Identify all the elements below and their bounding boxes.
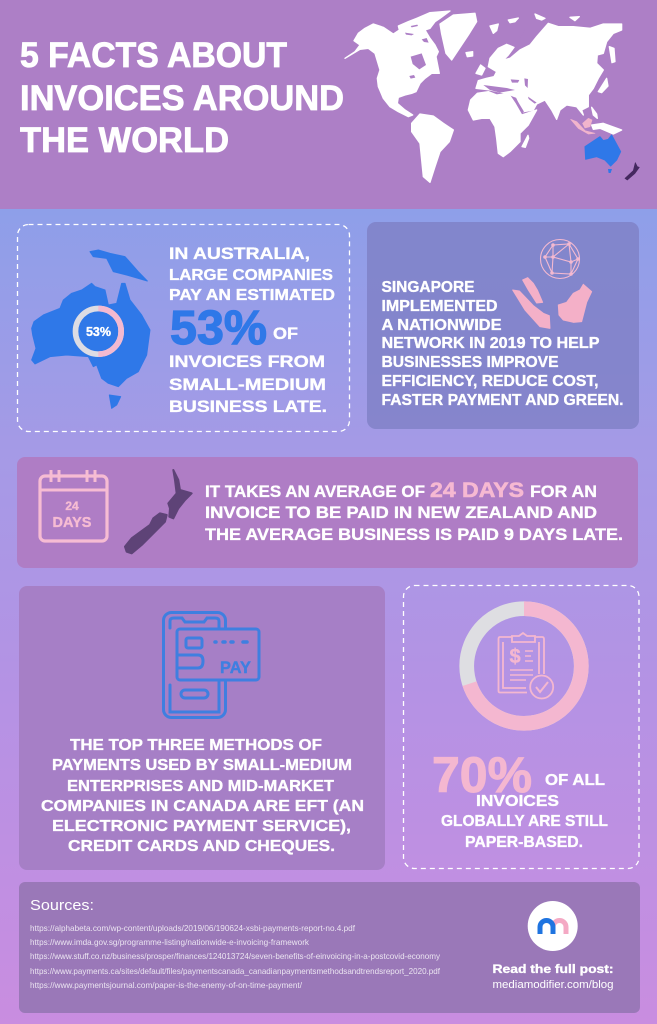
source links: https://www.payments.ca/sites/default/files/paymentscanada_canadianpaymentsmethodsandtrendsreport_2020.pdf <box>30 966 441 976</box>
text: Australia fact: IN AUSTRALIA, <box>169 244 310 263</box>
text: paper invoices fact: GLOBALLY ARE STILL <box>441 813 608 830</box>
title <box>20 36 344 160</box>
sources heading: Sources: <box>30 897 94 914</box>
source links: https://www.stuff.co.nz/business/prosper/finances/124013724/seven-benefits-of-einvoicing-in-a-postcovid-economy <box>30 951 441 961</box>
call to action <box>492 962 614 991</box>
icon: invoice clipboard <box>498 633 553 698</box>
text: Canada fact: THE TOP THREE METHODS OF <box>70 737 322 754</box>
panel: New Zealand <box>17 457 638 568</box>
panel: Singapore <box>367 222 639 429</box>
icon: network globe <box>540 240 580 278</box>
source links: https://alphabeta.com/wp-content/uploads/2019/06/190624-xsbi-payments-report-no.4.pdf <box>30 923 356 933</box>
text: Canada fact: COMPANIES IN CANADA ARE EFT (AN <box>41 798 364 815</box>
icon: Australia map with donut <box>32 250 150 408</box>
text: Singapore fact: EFFICIENCY, REDUCE COST, <box>382 373 598 390</box>
donut label: 53% <box>86 325 111 339</box>
header band <box>0 0 657 209</box>
icon: calendar <box>40 470 107 541</box>
text: paper invoices fact: PAPER-BASED. <box>465 834 583 851</box>
text: paper invoices fact: INVOICES <box>476 793 559 810</box>
source links: https://www.imda.gov.sg/programme-listing/nationwide-e-invoicing-framework <box>30 937 310 947</box>
title: 5 FACTS ABOUT <box>20 36 287 75</box>
text: New Zealand fact <box>205 479 623 544</box>
text: Singapore fact <box>382 279 624 409</box>
text: Singapore fact: FASTER PAYMENT AND GREEN. <box>382 392 624 409</box>
text: Canada fact: ENTERPRISES AND MID-MARKET <box>67 778 334 795</box>
text: Australia fact: OF <box>273 324 298 343</box>
text: New Zealand fact: IT TAKES AN AVERAGE OF <box>205 482 425 501</box>
title: INVOICES AROUND <box>20 79 344 118</box>
call to action: Read the full post: <box>492 962 614 976</box>
panel: paper invoices <box>404 586 639 868</box>
icon: calendar: 24 <box>65 499 79 513</box>
title: THE WORLD <box>20 121 229 160</box>
world map <box>345 11 639 182</box>
text: paper invoices fact: 70% <box>432 747 532 803</box>
text: New Zealand fact: FOR AN <box>530 482 597 501</box>
source links: https://www.paymentsjournal.com/paper-is-the-enemy-of-on-time-payment/ <box>30 980 303 990</box>
text: New Zealand fact: THE AVERAGE BUSINESS IS PAID 9 DAYS LATE. <box>205 525 623 544</box>
text: Singapore fact: NETWORK IN 2019 TO HELP <box>382 335 600 352</box>
text: Canada fact: ELECTRONIC PAYMENT SERVICE), <box>52 818 351 835</box>
text: Singapore fact: BUSINESSES IMPROVE <box>382 354 558 371</box>
text: Australia fact: PAY AN ESTIMATED <box>169 287 335 304</box>
text: Singapore fact: A NATIONWIDE <box>382 317 502 334</box>
text: paper invoices fact <box>432 747 608 851</box>
panel: Canada <box>19 586 385 870</box>
logo: mediamodifier <box>528 901 578 951</box>
icon: phone and card: PAY <box>220 658 252 677</box>
text: New Zealand fact: 24 DAYS <box>430 479 524 502</box>
text: Canada fact: CREDIT CARDS AND CHEQUES. <box>68 838 335 855</box>
text: Australia fact: BUSINESS LATE. <box>169 397 327 416</box>
icon: Sumatra, Malaysia and Borneo <box>513 278 592 328</box>
call to action: mediamodifier.com/blog <box>492 979 614 991</box>
text: Australia fact <box>169 244 335 416</box>
text: Australia fact: INVOICES FROM <box>169 352 325 371</box>
donut chart: 70 percent <box>467 609 581 723</box>
text: Singapore fact: SINGAPORE <box>382 279 474 296</box>
source links <box>30 923 441 990</box>
icon: calendar: DAYS <box>53 515 92 531</box>
text: Canada fact: PAYMENTS USED BY SMALL-MEDIUM <box>52 757 352 774</box>
icon: New Zealand map <box>125 470 192 553</box>
text: Australia fact: LARGE COMPANIES <box>169 267 333 284</box>
text: Australia fact: 53% <box>170 302 267 355</box>
text: Canada fact <box>41 737 364 855</box>
text: Singapore fact: IMPLEMENTED <box>382 298 498 315</box>
panel: Australia <box>18 224 350 432</box>
text: New Zealand fact: INVOICE TO BE PAID IN NEW ZEALAND AND <box>205 503 597 522</box>
page background <box>0 209 657 1024</box>
icon: phone and card <box>164 612 259 718</box>
icon: invoice clipboard: $ <box>509 646 521 668</box>
text: paper invoices fact: OF ALL <box>545 772 605 789</box>
panel: sources <box>19 882 640 1013</box>
text: Australia fact: SMALL-MEDIUM <box>169 375 326 394</box>
